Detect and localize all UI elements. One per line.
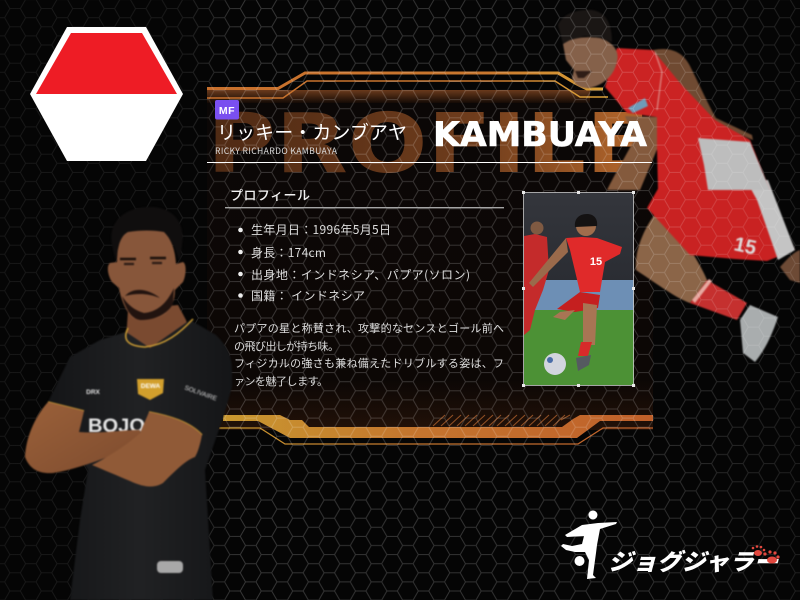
eyes [120, 258, 166, 259]
lower arm [607, 116, 658, 190]
position badge: MF: MF [219, 105, 235, 117]
photo: player dribbling on pitch [522, 191, 635, 387]
player: portrait in black kit: DEWA [141, 383, 161, 390]
chest mark: DRX [86, 389, 101, 396]
section heading: プロフィール [230, 185, 310, 204]
head [563, 37, 618, 88]
profile facts list: 国籍： インドネシア [251, 287, 365, 304]
beard [122, 288, 174, 320]
player: portrait in black kit [25, 207, 232, 600]
biography text: の飛び出しが持ち味。 [234, 338, 339, 354]
hem badge [157, 561, 183, 573]
biography text: パプアの星と称賛され、攻撃的なセンスとゴール前へ [234, 320, 504, 336]
sponsor text: BOJO [88, 416, 145, 437]
surname display: KAMBUAYA [433, 115, 648, 155]
player: running figure in red kit: 15 [732, 233, 758, 260]
advertising board [524, 280, 634, 310]
bottom decorative band [219, 415, 653, 444]
watermark: PROFILE heading: PROFILE [207, 97, 650, 192]
mustache [125, 290, 160, 298]
shoe [740, 305, 778, 362]
pitch [524, 310, 634, 385]
biography text [234, 320, 504, 389]
shirt body [48, 320, 232, 600]
paw prints [752, 545, 780, 564]
header divider [207, 162, 652, 163]
logo: Jogujaran [561, 510, 780, 579]
front leg [636, 206, 707, 303]
profile facts list: 出身地：インドネシア、パプア(ソロン) [251, 266, 470, 283]
raised arm [653, 49, 753, 140]
flag: Indonesia hexagon [30, 27, 183, 161]
player name: romanized: RICKY RICHARDO KAMBUAYA [215, 145, 338, 157]
sock [690, 280, 747, 320]
shorts [647, 180, 795, 261]
wordmark: ジョグジャラー [608, 543, 779, 577]
crest [137, 379, 164, 400]
profile facts list: 生年月日：1996年5月5日 [251, 221, 391, 238]
background player [524, 234, 549, 335]
rear leg [780, 250, 800, 283]
folded arm lower [25, 402, 141, 473]
panel: profile background [207, 96, 653, 430]
hair [111, 207, 183, 263]
biography text: フィジカルの強さも兼ね備えたドリブルする姿は、フ [234, 355, 504, 371]
silhouette [561, 510, 617, 579]
face [108, 230, 186, 320]
profile facts list: 身長：174cm [251, 244, 326, 261]
main player [566, 237, 622, 292]
profile facts list [238, 221, 470, 304]
ball [544, 353, 566, 375]
player: running figure in red kit [558, 10, 800, 362]
sleeve trim [48, 402, 202, 435]
player name: Japanese: リッキー・カンブアヤ [217, 118, 407, 145]
shirt [605, 48, 770, 190]
sponsor mark: SOLIVAIRE [183, 385, 218, 403]
biography text: ァンを魅了します。 [234, 373, 328, 389]
photo: player dribbling on pitch: 15 [590, 256, 602, 268]
folded arm upper [92, 412, 202, 487]
top decorative band [207, 73, 608, 98]
ball [574, 556, 584, 566]
neck [126, 305, 190, 350]
collar [126, 319, 193, 347]
position badge: MF [215, 100, 239, 120]
selection frame [524, 192, 634, 386]
